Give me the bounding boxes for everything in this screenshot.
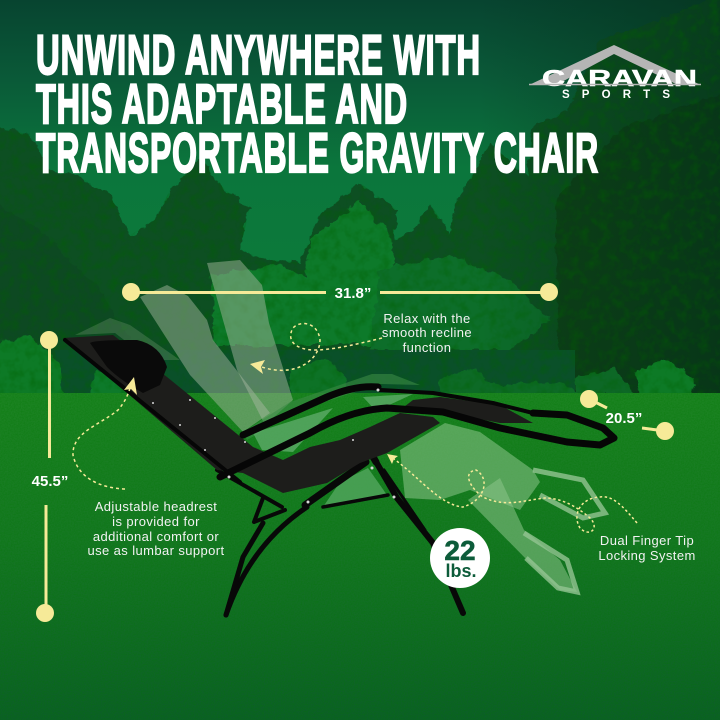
- background: sky: [0, 0, 720, 400]
- dimension: depth 20.5: [580, 390, 674, 440]
- logo: Caravan Sports: [529, 45, 701, 101]
- title: THIS ADAPTABLE AND: [36, 72, 408, 135]
- title: [36, 23, 599, 184]
- background: lawn: [0, 393, 720, 720]
- dimension: height 45.5: [32, 331, 68, 622]
- ghost image: reclined positions: [75, 260, 605, 592]
- chair headrest: [90, 340, 167, 393]
- callout: locking system: Dual Finger Tip: [600, 533, 694, 548]
- chair rivets: [152, 388, 396, 504]
- background: fence: [55, 350, 575, 395]
- background: far-right shade: [480, 0, 720, 400]
- callout: recline: [382, 311, 472, 355]
- callout: headrest: Adjustable headrest: [95, 499, 217, 514]
- weight badge: lbs.: [445, 561, 477, 581]
- chair: [63, 335, 614, 615]
- callout: headrest: additional comfort or: [93, 529, 219, 544]
- callout: recline: function: [403, 340, 451, 355]
- callout: headrest: is provided for: [112, 514, 200, 529]
- callout: headrest: [87, 499, 225, 558]
- background: foliage texture: [0, 0, 720, 400]
- background: tree line: [0, 0, 720, 400]
- callout: recline: Relax with the: [383, 311, 471, 326]
- logo: Caravan Sports: CARAVAN: [542, 65, 697, 91]
- callout: locking system: Locking System: [598, 548, 696, 563]
- callout arrow: recline: [250, 324, 382, 374]
- dimension: depth 20.5: 20.5”: [606, 410, 642, 427]
- callout: locking system: [598, 533, 696, 563]
- logo: Caravan Sports: SPORTS: [562, 89, 670, 101]
- dimension: width 31.8: 31.8”: [335, 285, 371, 302]
- callout arrow: headrest: [73, 377, 137, 489]
- chair armrests and footrest frame: [65, 340, 614, 482]
- dimension: width 31.8: [122, 283, 558, 302]
- callout arrow: locking system: [387, 454, 637, 532]
- chair legs and frame: [217, 438, 463, 615]
- chair fabric back and seat: [63, 335, 440, 493]
- callout: headrest: use as lumbar support: [87, 543, 225, 558]
- dimension: height 45.5: 45.5”: [32, 473, 68, 490]
- callout: recline: smooth recline: [382, 325, 472, 340]
- weight badge: 22: [444, 535, 476, 566]
- weight badge: [430, 528, 490, 588]
